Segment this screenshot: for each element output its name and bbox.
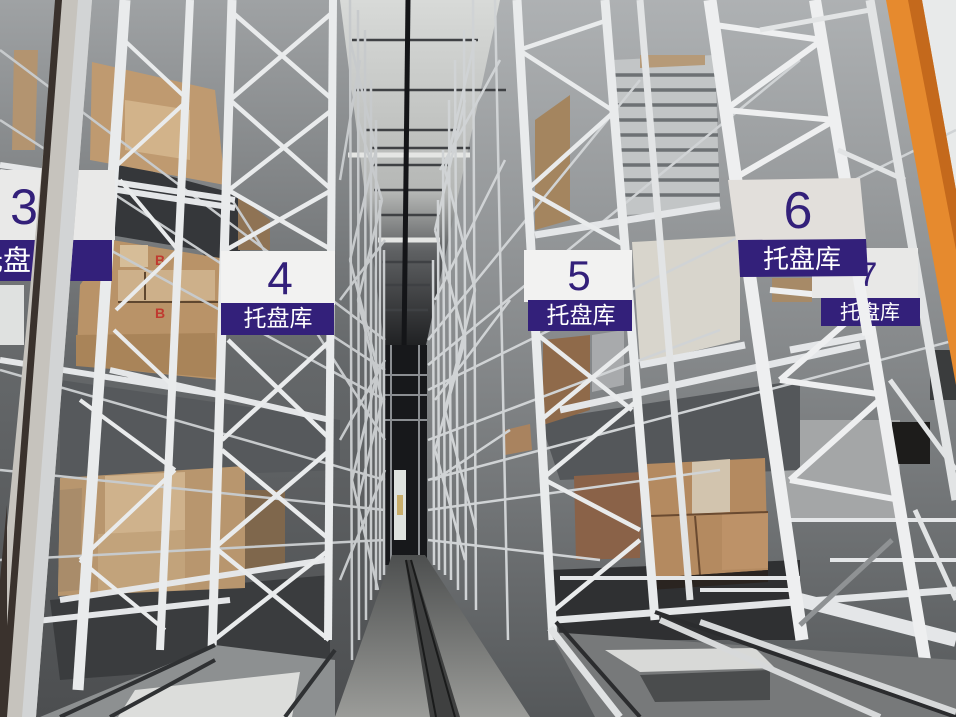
left truss frame, uprights 125 to 190	[78, 0, 190, 690]
foreground column, left	[0, 0, 92, 717]
sign 4	[221, 251, 335, 335]
truss frame holding sign 5	[517, 0, 655, 640]
background: wall, top right	[918, 0, 956, 190]
sign 3	[0, 170, 115, 281]
far rack bracing, left	[0, 0, 385, 660]
sign 4: 托盘库	[244, 305, 312, 331]
background: right rack depth	[415, 0, 956, 717]
far rack bracing, right	[428, 0, 956, 640]
sign 5	[524, 250, 632, 331]
sign 6	[728, 178, 868, 277]
sign 7: 7	[859, 256, 877, 294]
dark shelf underside, right lower	[550, 560, 800, 640]
sign 7: 托盘库	[840, 301, 900, 324]
cartons: left middle	[76, 240, 220, 380]
dark shelf underside, left bottom	[50, 575, 330, 680]
stacked white trays, right top	[535, 55, 720, 230]
dark shelf underside, right upper	[540, 380, 800, 480]
truss frame holding sign 4	[212, 0, 333, 650]
cartons: left middle: B	[155, 305, 165, 321]
dark shelf underside, left upper	[110, 160, 240, 300]
sign 4: 4	[267, 252, 293, 304]
background: left rack depth	[0, 0, 405, 717]
cartons: left top	[12, 50, 270, 250]
outer right truss	[640, 0, 956, 600]
sign 7	[812, 248, 920, 326]
sign 6: 6	[784, 182, 812, 240]
truss frame holding sign 6	[710, 0, 930, 690]
ceiling	[340, 0, 506, 350]
dark shelf underside, left lower	[60, 380, 340, 480]
sign 3: 3	[10, 179, 38, 235]
floor with rail	[335, 555, 530, 717]
rack shelf beams, right	[535, 205, 956, 640]
white goods, left side	[0, 285, 24, 345]
dark machine at right edge	[892, 350, 956, 464]
cartons: left middle: B	[155, 252, 165, 268]
sign 5: 5	[567, 252, 591, 299]
cartons: right centre	[543, 330, 624, 425]
sign 6: 托盘库	[763, 244, 841, 274]
rack shelf beams, left	[0, 165, 330, 625]
upright over sign 7	[852, 240, 868, 335]
sign 5: 托盘库	[546, 302, 616, 328]
white wrapped goods, right middle	[632, 236, 812, 364]
orange column	[886, 0, 956, 385]
cartons: left bottom	[58, 466, 285, 596]
background: grey wall behind right rack	[780, 420, 900, 520]
cartons: right bottom	[505, 424, 768, 590]
aisle far end	[385, 345, 427, 565]
foreground conveyor, bottom left	[40, 645, 335, 717]
foreground conveyor, bottom right	[550, 612, 956, 717]
